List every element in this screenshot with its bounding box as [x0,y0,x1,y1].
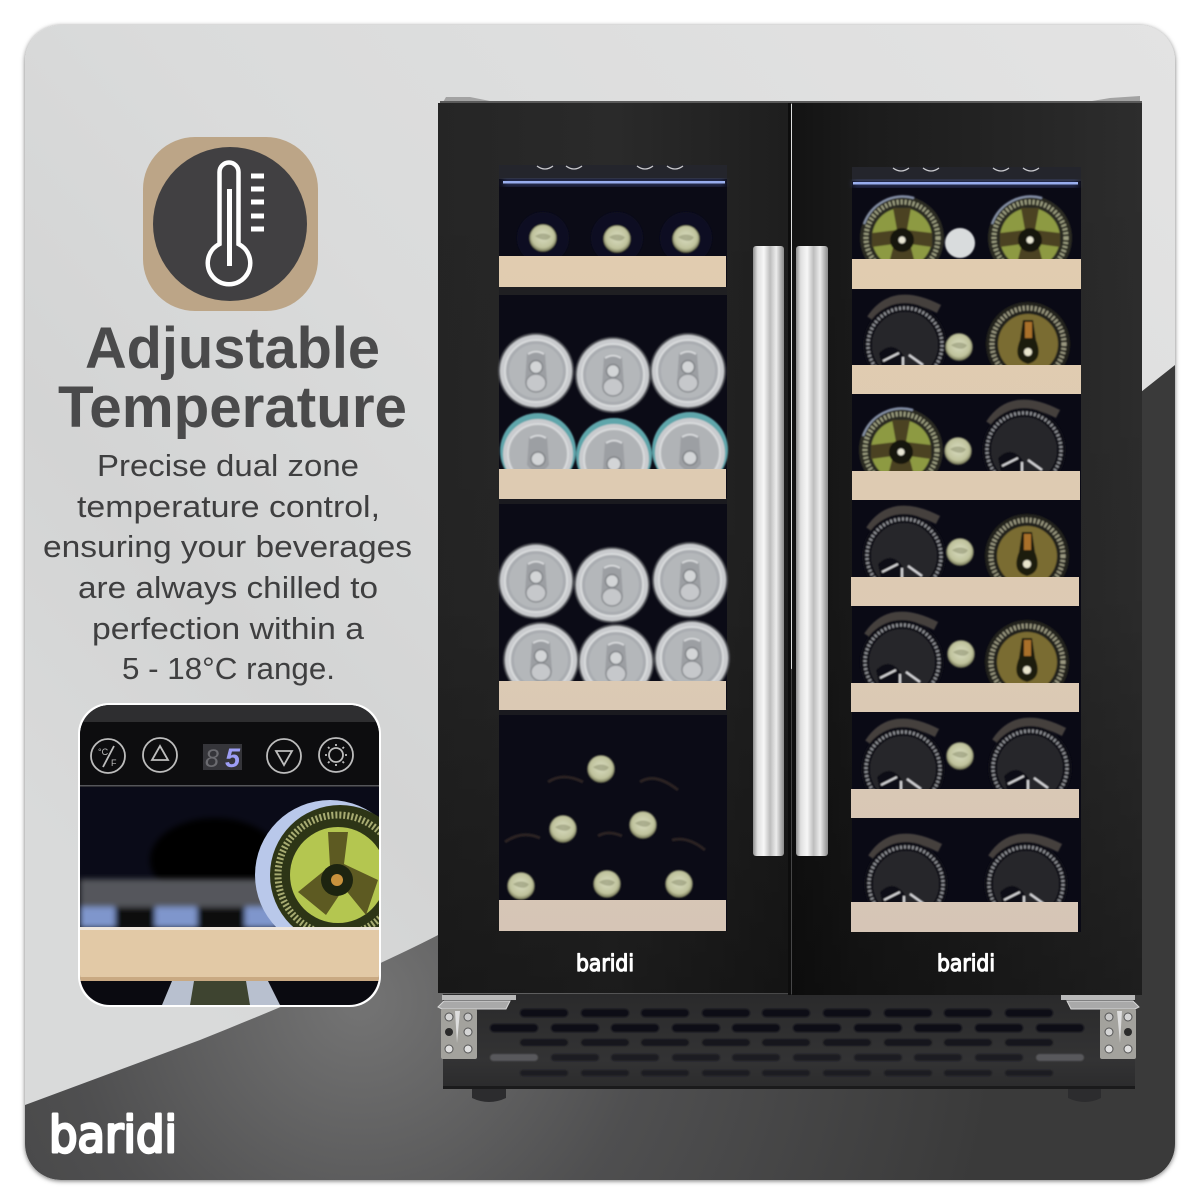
fridge top hinges [440,96,1142,104]
description text: Precise dual zone [97,448,359,483]
logo: right door baridi: baridi [937,951,995,977]
left zone: top row bottles [517,212,712,264]
left door [438,103,788,993]
right bottom hinge [1061,995,1139,1059]
control: temperature display: 5 [225,743,241,773]
control: temperature display: 8 [205,745,219,773]
heading: Adjustable [85,316,380,381]
control: C/F button: °C [98,747,109,757]
control: temperature display [203,743,242,773]
ventilation base with slots [443,994,1135,1089]
description text: are always chilled to [78,570,378,605]
left zone: lower cans [498,542,730,700]
fridge feet [472,1088,1101,1102]
right door handle [796,246,828,856]
right zone: bottle rows [859,196,1072,926]
left glass window [499,165,727,931]
description text [43,448,412,686]
left door handle [753,246,784,856]
left zone: wooden shelves [499,256,726,931]
description text: temperature control, [77,489,380,524]
description text: 5 - 18°C range. [122,651,335,686]
left zone: stacked bottles [505,754,705,901]
control: C/F button: F [111,758,117,768]
icon: wine bottle close-up [255,800,379,927]
icon: thermometer badge [143,137,318,311]
wooden shelf [80,927,379,981]
control: C/F button [91,739,125,773]
control: up button [143,738,177,772]
description text: ensuring your beverages [43,529,412,564]
description text: perfection within a [92,611,365,646]
heading [58,316,407,440]
control: light button [319,738,353,772]
right door [788,103,1142,995]
heading: Temperature [58,375,407,440]
logo: baridi bottom left: baridi [49,1106,177,1164]
right zone: wooden shelves [851,259,1081,932]
left bottom hinge [438,995,516,1059]
inset photo: control panel close-up [78,703,410,1007]
left zone: upper cans [498,333,728,494]
control: down button [267,739,301,773]
wine fridge product [438,96,1142,1102]
logo: left door baridi: baridi [576,951,634,977]
right glass window [852,167,1081,932]
